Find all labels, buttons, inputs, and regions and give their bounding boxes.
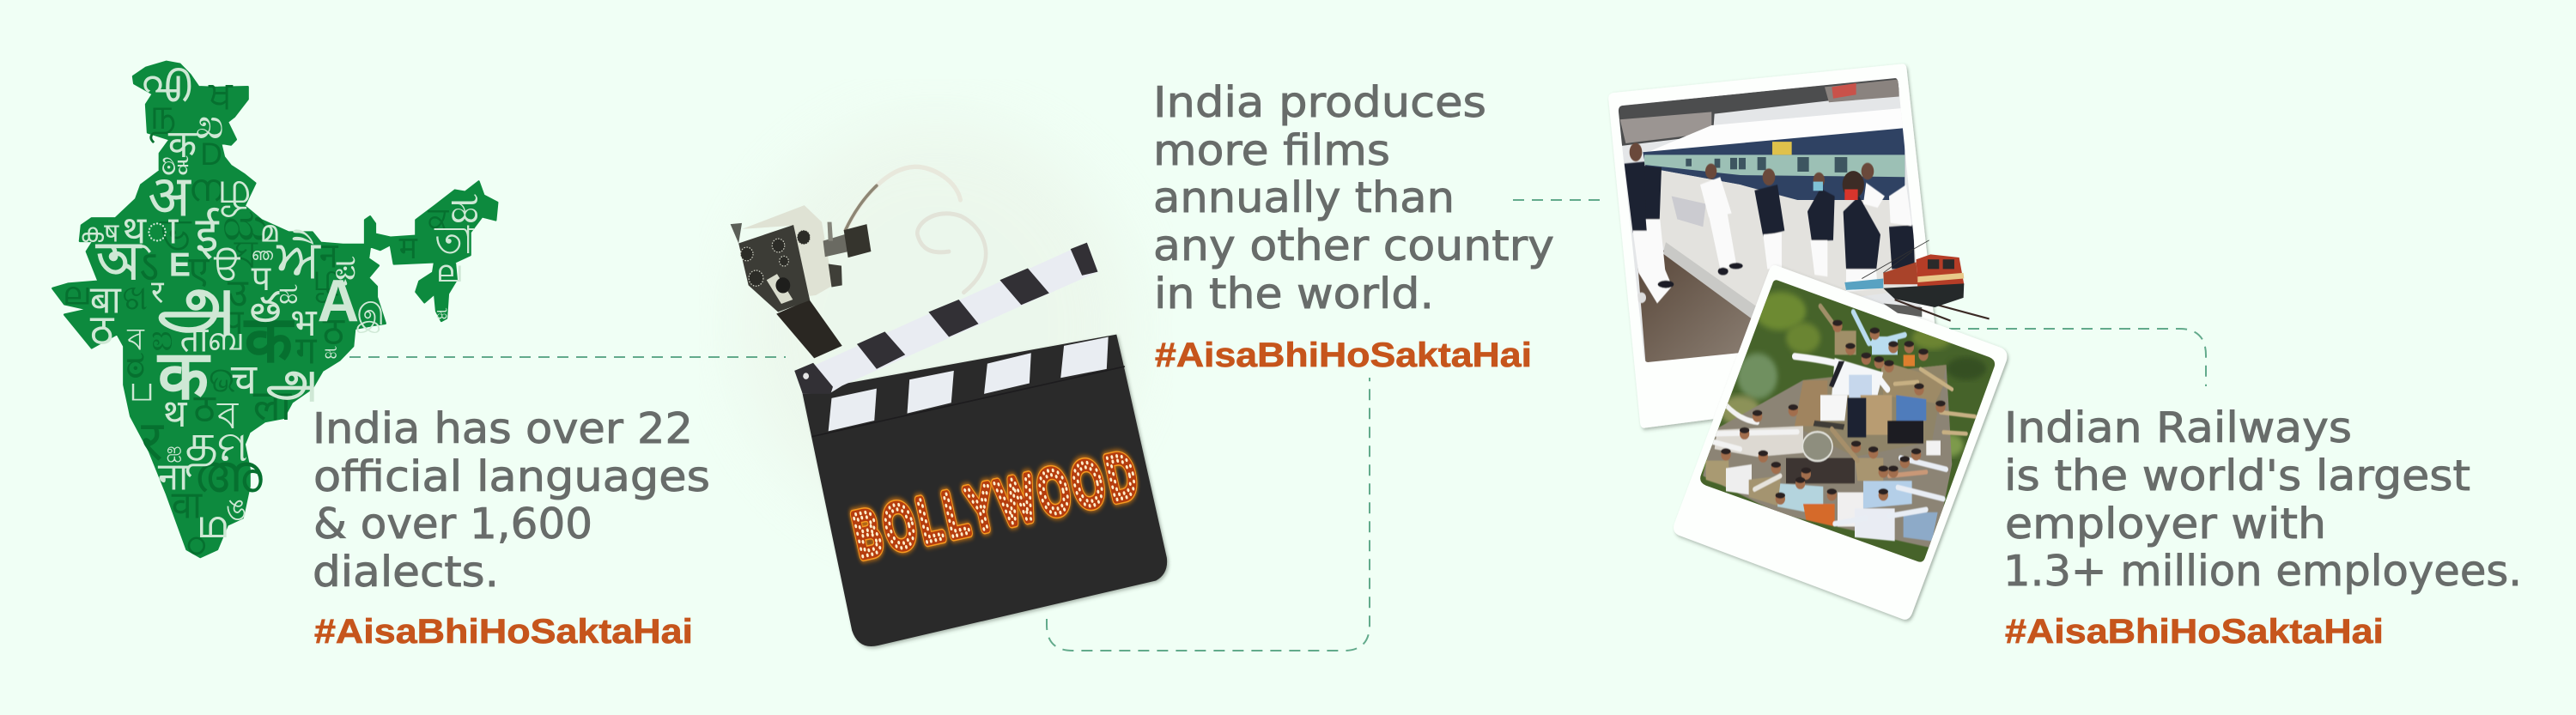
photo: railway staff group <box>1674 265 2009 620</box>
text block: films <box>1153 78 1554 374</box>
dark script glyphs: ঘ <box>234 233 258 276</box>
light script glyphs: அ <box>266 354 318 406</box>
BOLLYWOOD marquee sign: BOLLYWOOD <box>848 439 1147 570</box>
dark script glyphs: ଭ <box>209 361 235 400</box>
map of India made of letters <box>52 53 497 561</box>
dark script glyphs: र <box>141 409 165 472</box>
dark script glyphs: ऽ <box>139 242 159 291</box>
text block: railways <box>2003 403 2522 651</box>
connector: clapperboard to film text <box>1047 378 1370 651</box>
text block: films: India produces <box>1153 78 1486 127</box>
light script glyphs: অ <box>95 231 143 290</box>
hashtag: #AisaBhiHoSaktaHai <box>314 613 693 651</box>
soft shadow behind clapperboard <box>738 120 1133 532</box>
dark script glyphs: ഠ <box>185 526 205 561</box>
crowd <box>1703 306 1975 548</box>
railway photographs <box>1608 64 2009 620</box>
light script glyphs: बा <box>90 279 122 322</box>
text block: railways: is the world's largest <box>2004 451 2470 500</box>
dark script glyphs: न <box>319 236 338 276</box>
light script glyphs: ता <box>180 320 209 360</box>
map silhouette <box>52 62 497 557</box>
clapper body <box>802 335 1167 646</box>
dark script glyphs: അ <box>193 444 263 503</box>
light script glyphs: थ्ा <box>122 209 179 254</box>
light script glyphs: ಠಿಕ <box>161 148 190 181</box>
BOLLYWOOD marquee sign: BOLLYWOOD <box>848 439 1147 570</box>
railway locomotive <box>1844 240 1990 321</box>
dark script glyphs: ಯ <box>222 200 268 249</box>
photo: station platform <box>1608 64 1935 428</box>
text block: languages: dialects. <box>313 548 499 597</box>
light script glyphs: भ <box>290 301 318 344</box>
light script glyphs: ല <box>436 255 462 288</box>
light script glyphs: ঙ <box>226 494 247 526</box>
connector: railway photos to railway text <box>1949 329 2206 386</box>
light script glyphs: च <box>231 356 258 403</box>
dark script glyphs: ਕ <box>427 200 450 236</box>
light script glyphs: E <box>169 246 191 284</box>
light script glyphs: थ <box>163 393 187 435</box>
text block: railways: 1.3+ million employees. <box>2003 547 2522 596</box>
text block: films: any other country <box>1153 221 1554 270</box>
dark script glyphs: ए <box>188 249 210 292</box>
connector: map to clapperboard <box>349 356 786 358</box>
dark script glyphs: प <box>224 302 245 342</box>
dark script glyphs: क <box>243 304 295 376</box>
light script glyphs: ബ <box>207 324 242 357</box>
light script glyphs: ई <box>195 207 220 262</box>
film strip <box>846 167 986 293</box>
light script glyphs: എ <box>140 53 191 103</box>
light script glyphs: A <box>318 269 359 335</box>
dark script glyphs: ಠ <box>125 343 145 386</box>
dark script glyphs: ভ <box>159 210 191 259</box>
light script glyphs: प <box>252 258 271 298</box>
dark script glyphs: ந <box>149 90 177 143</box>
text block: films: more films <box>1153 126 1390 175</box>
dark script glyphs: उ <box>228 272 249 315</box>
light script glyphs: ना <box>158 456 190 499</box>
dark script glyphs: ല <box>63 276 89 311</box>
light script glyphs: ಹ <box>325 341 337 363</box>
light script glyphs: ব <box>216 395 240 437</box>
light script glyphs: তা <box>434 220 475 262</box>
faces <box>1721 320 1946 505</box>
light script glyphs: र <box>151 274 165 309</box>
light script glyphs: ഞ <box>252 246 273 264</box>
text block: films: in the world. <box>1154 270 1434 318</box>
movie camera <box>731 205 871 358</box>
dark script glyphs: D <box>200 136 222 172</box>
dark script glyphs: ग <box>295 330 318 373</box>
BOLLYWOOD marquee sign: BOLLYWOOD <box>848 439 1147 570</box>
hashtag: #AisaBhiHoSaktaHai <box>2005 613 2384 651</box>
text block: languages: India has over 22 <box>313 404 693 453</box>
light script glyphs: ମ <box>217 424 248 470</box>
light script glyphs: മ <box>259 215 278 249</box>
light script glyphs: ੳ <box>213 245 241 287</box>
light script glyphs: இ <box>356 299 385 333</box>
dark script glyphs: ठ <box>193 387 216 430</box>
light script glyphs: ಹ <box>436 305 447 324</box>
light script glyphs: ಹ <box>278 277 299 311</box>
dark script glyphs: म <box>399 230 418 265</box>
light script glyphs: ठ <box>90 307 114 354</box>
hashtag: #AisaBhiHoSaktaHai <box>1155 336 1532 374</box>
light script glyphs: త <box>250 284 282 331</box>
clapper divider line <box>812 367 1125 437</box>
light script glyphs: ಹ <box>450 183 479 232</box>
light script glyphs: ಫ <box>334 247 356 287</box>
light script glyphs: ப <box>129 369 155 409</box>
connector: film text to railway photo <box>1513 199 1607 201</box>
lower stripes <box>829 337 1109 431</box>
light script glyphs: ഥ <box>197 504 227 545</box>
light script glyphs: ழ <box>217 163 252 217</box>
light script glyphs: ಖ <box>195 101 223 147</box>
light script glyphs: ஐ <box>167 439 182 462</box>
light script glyphs: ব <box>126 321 145 357</box>
light script glyphs: அ <box>158 261 235 342</box>
light script glyphs: क <box>156 336 211 414</box>
BOLLYWOOD marquee sign: BOLLYWOOD <box>848 439 1147 570</box>
light script glyphs: த <box>185 412 218 477</box>
text block: languages: official languages <box>313 452 710 501</box>
dark script glyphs: ന <box>188 167 223 209</box>
dark script glyphs: ला <box>253 382 293 429</box>
dark script glyphs <box>63 74 450 561</box>
dark script glyphs: ଖ <box>122 278 148 318</box>
foliage <box>1754 292 1806 330</box>
light script glyphs: കष <box>80 219 119 248</box>
text block: films: annually than <box>1153 173 1455 222</box>
light script glyphs: ਐ <box>276 228 321 288</box>
dark script glyphs: ठ <box>323 311 345 353</box>
dark script glyphs: ழ <box>313 256 343 303</box>
light script glyphs: क <box>168 123 197 166</box>
light script glyphs <box>80 53 479 545</box>
dark script glyphs: वा <box>172 484 204 526</box>
text block: languages: & over 1,600 <box>313 500 592 548</box>
clapperboard and camera <box>731 167 1167 646</box>
dark script glyphs: ਖ <box>208 74 234 117</box>
clapper top stick <box>794 243 1097 394</box>
light script glyphs: अ <box>148 165 191 229</box>
text block: railways: employer with <box>2005 500 2326 548</box>
text block: railways: Indian Railways <box>2004 403 2352 452</box>
text block: languages <box>313 404 710 651</box>
dark script glyphs: ಐ <box>151 318 173 358</box>
